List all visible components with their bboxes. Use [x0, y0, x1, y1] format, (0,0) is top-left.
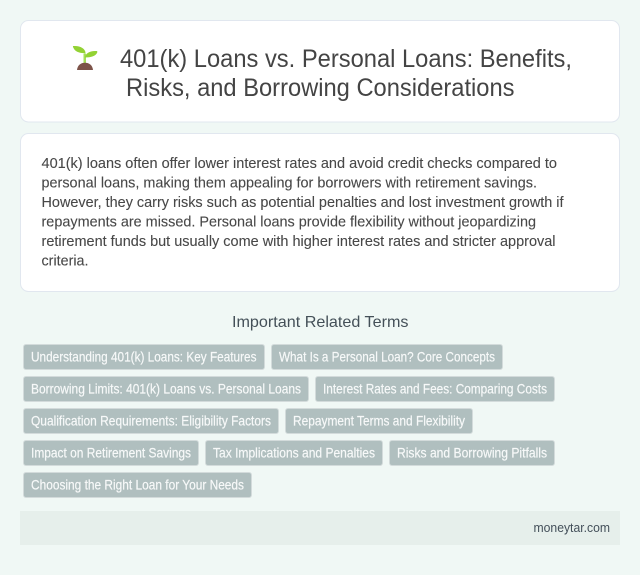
tag	[24, 344, 264, 370]
tag	[24, 472, 252, 498]
tag: Impact on Retirement Savings	[31, 444, 191, 460]
title text	[120, 45, 572, 102]
tag	[206, 440, 382, 466]
tag list	[24, 344, 554, 498]
tag	[286, 408, 472, 434]
paragraph text: However, they carry risks such as potential penalties and lost investment growth if	[42, 195, 564, 211]
panel: summary paragraph	[20, 134, 620, 292]
tag: Repayment Terms and Flexibility	[293, 412, 465, 428]
paragraph text: 401(k) loans often offer lower interest rates and avoid credit checks compared to	[42, 156, 557, 172]
title text: 401(k) Loans vs. Personal Loans: Benefits,	[120, 45, 572, 73]
tag: Qualification Requirements: Eligibility Factors	[31, 412, 271, 428]
tag	[24, 408, 278, 434]
heading: important related terms: Important Related Terms	[232, 314, 408, 331]
icon: seedling	[73, 46, 97, 70]
tag	[24, 440, 198, 466]
title text: Risks, and Borrowing Considerations	[126, 74, 514, 102]
tag	[272, 344, 502, 370]
panel: title card	[20, 20, 620, 122]
footer: moneytar.com	[534, 521, 610, 535]
tag: Borrowing Limits: 401(k) Loans vs. Personal Loans	[31, 380, 301, 396]
tag: Choosing the Right Loan for Your Needs	[31, 476, 244, 492]
paragraph text: retirement funds but usually come with higher interest rates and stricter approval	[42, 234, 556, 250]
tag: Tax Implications and Penalties	[213, 444, 375, 460]
tag: Interest Rates and Fees: Comparing Costs	[323, 380, 547, 396]
tag: Understanding 401(k) Loans: Key Features	[31, 348, 256, 364]
tag	[24, 376, 308, 402]
paragraph text	[42, 156, 564, 270]
tag: What Is a Personal Loan? Core Concepts	[279, 348, 495, 364]
footer	[20, 511, 620, 545]
paragraph text: personal loans, making them appealing for borrowers with retirement savings.	[42, 176, 537, 192]
tag	[316, 376, 554, 402]
paragraph text: repayments are missed. Personal loans provide flexibility without jeopardizing	[42, 214, 536, 230]
tag: Risks and Borrowing Pitfalls	[397, 444, 547, 460]
tag	[390, 440, 554, 466]
paragraph text: criteria.	[42, 254, 88, 270]
